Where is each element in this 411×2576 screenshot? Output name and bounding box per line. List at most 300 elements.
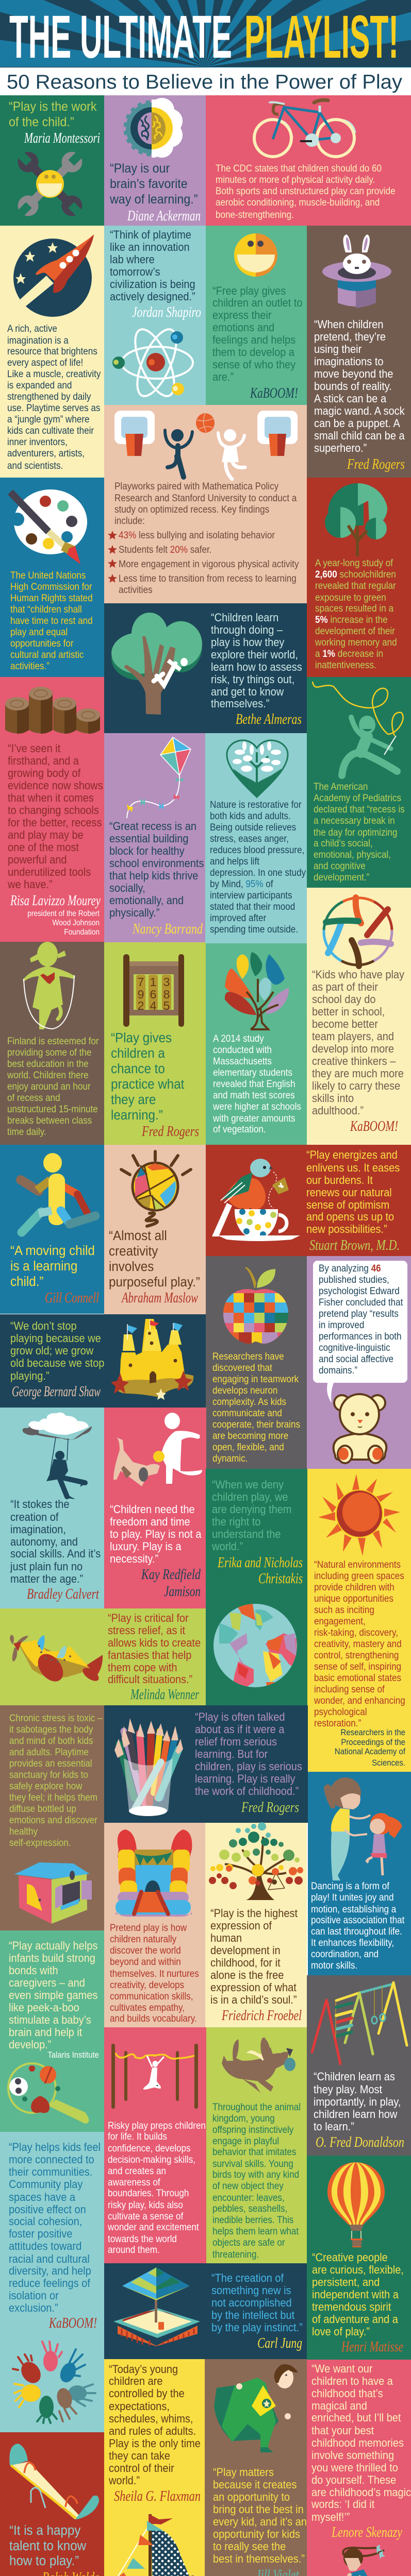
body text: sense of self, inspiring: [314, 1661, 401, 1672]
panel: nature is restorative: [205, 733, 307, 943]
quote: understand the: [212, 1528, 281, 1540]
quote: playing because we: [10, 1332, 101, 1345]
body text: play and equal: [10, 626, 68, 637]
quote: learn how to assess: [211, 661, 302, 673]
quote: “It is a happy: [9, 2523, 81, 2538]
icon: child climbing tree: [111, 613, 202, 715]
body text: children naturally: [110, 1934, 176, 1944]
quote: better in school,: [312, 1006, 385, 1018]
quote: “The creation of: [211, 2272, 284, 2284]
key findings list: Students felt 20% safer.: [119, 544, 212, 555]
speech bubble: By analyzing 46: [319, 1263, 381, 1274]
body text: can last throughout life.: [311, 1926, 402, 1937]
quote: myself!’”: [311, 2511, 350, 2523]
quote: “Kids who have play: [312, 969, 404, 981]
quote: feelings and helps: [212, 334, 295, 346]
quote: about as if it were a: [195, 1723, 285, 1736]
quote: creation of: [10, 1511, 59, 1523]
quote: [108, 2363, 201, 2487]
quote: pretend, they’re: [314, 331, 386, 343]
quote: of adventure and a: [312, 2313, 398, 2326]
panel: pretend quote rabbit: [307, 226, 411, 478]
body text: coordination, and: [311, 1948, 379, 1959]
icon: superhero child: [214, 2364, 298, 2452]
quote: [312, 969, 404, 1117]
quote: emotionally, and: [109, 894, 184, 907]
quote: the work of childhood.”: [195, 1785, 299, 1798]
panel: green spaces study: [307, 478, 411, 677]
icon: abacus number board: 4: [150, 999, 157, 1012]
quote: to really see the: [213, 2540, 286, 2553]
body text: a 1% decrease in: [315, 648, 383, 659]
name and title: Wood Johnson: [53, 918, 100, 927]
quote: [211, 612, 302, 710]
panel: Finland recess: [0, 942, 104, 1145]
quote: they play. Most: [314, 2083, 382, 2096]
quote: relief from serious: [195, 1736, 277, 1748]
body text: Academy of Pediatrics: [314, 792, 401, 803]
body text: have time to rest and: [10, 615, 93, 626]
quote: every kid, and it’s an: [213, 2516, 307, 2528]
quote: risk, try things out,: [211, 673, 294, 686]
name: Bradley Calvert: [27, 1586, 100, 1602]
body text: enjoy around an hour: [7, 1081, 91, 1092]
body text: provides an essential: [9, 1758, 92, 1769]
quote: “It stokes the: [10, 1498, 70, 1511]
icon: wrenches with smile: [12, 146, 88, 222]
icon: girl with skipping rope: [23, 942, 75, 1029]
name: Talaris Institute: [47, 2050, 99, 2060]
icon: rabbit in hat: [322, 234, 391, 308]
quote: “When children: [314, 318, 384, 331]
quote: even simple games: [9, 1989, 97, 2002]
name: Melinda Wenner: [130, 1687, 199, 1703]
body text: a necessary break in: [314, 815, 395, 826]
quote: block for healthy: [109, 845, 185, 857]
quote: independent with a: [312, 2289, 399, 2301]
quote: children play, we: [212, 1491, 288, 1503]
panel: kids who have play: [307, 888, 411, 1145]
quote: purposeful play.”: [109, 1275, 200, 1290]
body text: and helps lift: [210, 856, 259, 867]
quote: like peek-a-boo: [9, 2002, 79, 2014]
quote: growing body of: [8, 767, 80, 779]
quote: [9, 2523, 87, 2568]
body text: depression. In one study: [210, 867, 306, 878]
quote: “I’ve seen it: [8, 742, 60, 755]
body text: [212, 1351, 300, 1464]
quote: brain and help it: [9, 2026, 83, 2039]
quote: Play is the only time: [109, 2437, 201, 2450]
body text: Research and Stanford University to conduct a: [114, 493, 297, 503]
body text: revealed that regular: [315, 580, 396, 591]
body text: [7, 323, 101, 471]
icon: heart with tree and hands: [227, 740, 288, 797]
body text: kids can cultivate their: [7, 425, 94, 436]
panel: Massachusetts study: [206, 943, 307, 1145]
panel: Bradley Calvert quote: [0, 1408, 104, 1608]
body text: [210, 799, 306, 935]
quote: powerful and: [8, 854, 67, 866]
quote: and opens us up to: [306, 1211, 394, 1223]
panel: community play spaces: [0, 2132, 104, 2432]
icon: child with dog and ball: [113, 1413, 202, 1486]
speech bubble: cognitive-linguistic: [319, 1342, 390, 1353]
body text: provide children with: [314, 1582, 394, 1592]
quote: involves: [109, 1259, 154, 1274]
body text: [314, 781, 405, 883]
quote: them cope with: [108, 1662, 177, 1674]
quote: children a: [111, 1046, 165, 1061]
icon: puzzle apple: [222, 1267, 289, 1347]
quote: team players, and: [312, 1030, 394, 1043]
panel: Risa Lavizzo-Mourey quote: [0, 677, 104, 942]
quote: world.”: [108, 2475, 140, 2487]
quote: develop into more: [312, 1043, 394, 1055]
body text: The United Nations: [10, 570, 86, 581]
quote: stress relief, as it: [108, 1624, 185, 1637]
speech bubble: domains.”: [319, 1365, 357, 1376]
quote: actively designed.”: [110, 291, 195, 303]
panel: imagination rocket: [0, 226, 104, 478]
body text: aerobic conditioning, muscle-building, and: [216, 197, 380, 208]
quote: way of learning.”: [109, 192, 198, 207]
quote: like an innovation: [110, 241, 190, 253]
quote: that your best: [311, 2425, 374, 2437]
quote: tomorrow’s: [110, 266, 160, 278]
body text: and creates an: [108, 2165, 166, 2176]
body text: awareness of: [108, 2177, 161, 2188]
body text: engage in playful: [212, 2136, 279, 2146]
body text: imagination is a: [7, 335, 69, 346]
icon: rocket: [13, 234, 94, 317]
name: Carl Jung: [257, 2335, 302, 2351]
body text: Pretend play is how: [110, 1922, 187, 1933]
speech bubble: psychologist Edward: [319, 1285, 400, 1296]
quote: [306, 1149, 400, 1235]
subtitle strip: 50 Reasons to Believe in the Power of Play: [7, 71, 403, 93]
speech bubble: pretend play “results: [319, 1308, 399, 1319]
quote: “Play is often talked: [195, 1711, 285, 1723]
body text: use. Playtime serves as: [7, 402, 100, 413]
body text: helps them learn what: [212, 2226, 299, 2236]
body text: stated that their mood: [210, 901, 295, 912]
body text: complexity. As kids: [212, 1396, 286, 1407]
icon: bicycle: [254, 100, 355, 157]
body text: develops neuron: [212, 1385, 277, 1396]
body text: engaging in teamwork: [212, 1374, 299, 1384]
quote: alone is the free: [210, 1969, 284, 1981]
quote: persistent, and: [312, 2276, 380, 2289]
quote: [10, 1243, 95, 1289]
quote: civilization is being: [110, 278, 195, 291]
icon: teddy bear: [334, 1394, 386, 1463]
quote: control of their: [109, 2462, 174, 2475]
panel: Lenore Skenazy quote scooter: [307, 2360, 411, 2576]
quote: socially,: [109, 882, 145, 894]
body text: objects are safe or: [212, 2237, 285, 2248]
body text: and cognitive: [314, 860, 366, 871]
source: Proceedings of the: [341, 1738, 405, 1747]
icon: seesaw: [9, 2444, 99, 2519]
speech bubble: Fisher concluded that: [319, 1297, 403, 1308]
body text: encounter: leaves,: [212, 2192, 285, 2203]
body text: pebbles, seashells,: [212, 2203, 287, 2214]
quote: autonomy, and: [10, 1536, 78, 1548]
quote: children to have a: [311, 2375, 393, 2387]
icon: sandbox with umbrella: [113, 2267, 200, 2346]
body text: strengthened by daily: [7, 391, 91, 402]
quote: as part of their: [312, 981, 378, 993]
quote: [7, 742, 103, 891]
quote: childhood memories: [311, 2437, 404, 2449]
body text: “Natural environments: [314, 1559, 401, 1570]
body text: play! It unites joy and: [311, 1892, 394, 1903]
quote: and play may be: [8, 829, 84, 841]
body text: cultivate a sense of: [108, 2211, 184, 2222]
quote: firsthand, and a: [8, 755, 79, 767]
quote: spaces have a: [9, 2191, 75, 2204]
icon: tree logs: [5, 687, 100, 734]
body text: 2,600 schoolchildren: [315, 569, 396, 580]
quote: freedom and time: [110, 1516, 190, 1528]
quote: Community play: [9, 2178, 83, 2191]
quote: our burdens. It: [306, 1174, 373, 1187]
body text: creativity, develops: [110, 1979, 184, 1990]
quote: isolation or: [9, 2290, 59, 2302]
icon: ring of linked arms: [324, 897, 392, 966]
quote: become better: [312, 1018, 378, 1030]
quote: more connected to: [9, 2154, 94, 2166]
quote: caregivers – and: [9, 1977, 85, 1989]
quote: “Play helps kids feel: [9, 2141, 101, 2154]
quote: “Play gives: [111, 1030, 172, 1045]
body text: positive association that: [311, 1914, 404, 1925]
quote: words: ‘I did it: [311, 2498, 374, 2511]
quote: them to develop a: [212, 346, 294, 359]
body text: Human Rights stated: [10, 592, 93, 603]
icon: kids playing basketball: [114, 411, 298, 479]
quote: allows kids to create: [108, 1637, 201, 1649]
quote: bring out the best in: [213, 2503, 304, 2516]
quote: talent to know: [9, 2538, 87, 2553]
body text: diffuse bottled up: [9, 1803, 76, 1814]
quote: matter the age.”: [10, 1573, 83, 1585]
quote: practice what: [111, 1077, 184, 1092]
quote: difficult situations.”: [108, 1673, 192, 1686]
body text: psychological: [314, 1706, 367, 1717]
body text: sanctuary for kids to: [9, 1769, 88, 1780]
name and title: Foundation: [64, 927, 100, 937]
body text: inner inventors,: [7, 436, 68, 447]
quote: [108, 1612, 201, 1686]
body text: communicate and: [212, 1408, 282, 1418]
quote: “We don’t stop: [10, 1320, 77, 1332]
name: Erika and Nicholas: [217, 1555, 303, 1571]
name: George Bernard Shaw: [12, 1384, 101, 1400]
quote: involve something: [311, 2449, 394, 2462]
speech bubble: published studies,: [319, 1274, 389, 1285]
quote: “A moving child: [10, 1243, 95, 1258]
quote: they are: [111, 1092, 156, 1107]
body text: behavior that imitates: [212, 2146, 296, 2157]
quote: [312, 2251, 404, 2338]
panel: innovation lab quote: [104, 226, 206, 405]
quote: [9, 1940, 97, 2051]
panel: animal kingdom play: [206, 2027, 307, 2263]
body text: Throughout the animal: [212, 2102, 301, 2112]
quote: play is how they: [211, 636, 285, 649]
quote: [195, 1711, 302, 1798]
quote: [109, 820, 204, 919]
quote: “Play is the work: [9, 99, 97, 114]
icon: girl on scooter: [325, 2545, 392, 2576]
icon: ring of handprints: [13, 2342, 95, 2423]
icon: paint palette: [10, 489, 87, 564]
quote: expectations,: [109, 2400, 170, 2413]
quote: attitudes toward: [9, 2240, 81, 2252]
panel: neuron teamwork: [206, 1256, 307, 1469]
quote: tremendous spirit: [312, 2301, 391, 2313]
quote: [211, 2272, 303, 2334]
quote: to learn.”: [314, 2121, 354, 2133]
icon: tree: [325, 483, 387, 556]
quote: magic wand. A sock: [314, 405, 405, 417]
quote: necessity.”: [110, 1553, 158, 1565]
body text: development.”: [314, 872, 369, 883]
body text: creativity, mastery and: [314, 1638, 402, 1649]
icon: baby rattle: [8, 2063, 89, 2124]
body text: inedible berries. This: [212, 2214, 293, 2225]
quote: that help kids thrive: [109, 870, 198, 882]
quote: move beyond the: [314, 368, 393, 380]
panel: pretend play bouncy castle: [104, 1823, 205, 2027]
quote: learning. Play is really: [195, 1773, 295, 1785]
quote: [109, 161, 198, 207]
quote: best in themselves.”: [213, 2553, 305, 2565]
name: Christakis: [258, 1571, 303, 1587]
quote: enlivens us. It eases: [306, 1162, 400, 1174]
body text: offspring instinctively: [212, 2124, 293, 2135]
body text: wonder and excitement: [107, 2222, 199, 2232]
source: Sciences.: [372, 1758, 405, 1768]
quote: world.”: [211, 1540, 243, 1553]
panel: learn through doing: [104, 603, 307, 733]
name: Fred Rogers: [241, 1800, 299, 1816]
speech bubble: in improved: [319, 1319, 364, 1330]
quote: positive effect on: [9, 2204, 86, 2216]
quote: “Play energizes and: [306, 1149, 398, 1161]
quote: “Creative people: [312, 2251, 388, 2264]
quote: that when it comes: [8, 792, 94, 804]
body text: opportunities for: [10, 638, 74, 649]
key findings list: [108, 530, 299, 595]
body text: reduces blood pressure,: [210, 844, 304, 855]
icon: globe: [213, 1604, 297, 1690]
panel: purposeful play quote: [104, 1145, 206, 1314]
quote: love of play.”: [312, 2326, 370, 2338]
body text: risky play, kids also: [108, 2199, 183, 2210]
body text: wonder, and enhancing: [314, 1695, 405, 1706]
quote: childhood that’s: [311, 2387, 383, 2400]
body text: around them.: [108, 2244, 160, 2255]
quote: of the child.”: [9, 115, 74, 129]
quote: old because we stop: [10, 1357, 104, 1369]
icon: toy plane: [10, 1635, 103, 1686]
panel: Talaris Institute quote: [0, 1930, 104, 2132]
body text: birds toy with any kind: [212, 2169, 299, 2180]
quote: fantasies that help: [108, 1649, 191, 1662]
quote: imagination,: [10, 1523, 66, 1536]
body text: unstructured 15-minute: [7, 1104, 98, 1114]
body text: cooperate, their brains: [212, 1419, 300, 1430]
quote: through doing –: [211, 624, 283, 636]
quote: [211, 1479, 292, 1553]
body text: [10, 570, 93, 671]
quote: creative thinkers –: [312, 1055, 396, 1067]
quote: grow old; we grow: [10, 1345, 94, 1357]
body text: inattentiveness.: [315, 659, 376, 670]
body text: with greater amounts: [212, 1113, 295, 1124]
quote: develop.”: [9, 2039, 51, 2051]
quote: [314, 2071, 401, 2133]
quote: “Play is critical for: [108, 1612, 189, 1624]
quote: playing.”: [10, 1370, 50, 1382]
quote: how to play.”: [9, 2553, 79, 2568]
body text: communication skills,: [110, 1991, 193, 2002]
quote: exclusion.”: [9, 2302, 58, 2314]
name: Jamison: [164, 1584, 201, 1600]
quote: “Free play gives: [212, 285, 286, 297]
name: Friedrich Froebel: [221, 2008, 302, 2024]
body text: Dancing is a form of: [311, 1880, 390, 1891]
quote: are.”: [212, 371, 234, 383]
body text: [311, 1880, 404, 1971]
quote: racial and cultural: [9, 2253, 90, 2265]
speech bubble: and social affective: [319, 1353, 393, 1364]
body text: including sense of: [314, 1684, 385, 1694]
body text: such as inciting: [314, 1604, 374, 1615]
quote: by the play instinct.”: [211, 2321, 303, 2334]
body text: unique opportunities: [314, 1593, 393, 1604]
source: [335, 1728, 406, 1768]
icon: sand castle: [111, 1319, 193, 1400]
key findings list: 43% less bullying and isolating behavior: [119, 530, 275, 540]
panel: moving child quote: [0, 1145, 104, 1314]
quote: something new is: [211, 2284, 291, 2297]
name: Gill Connell: [45, 1290, 99, 1306]
quote: are curious, flexible,: [312, 2264, 404, 2276]
source: National Academy of: [335, 1747, 406, 1756]
panel: Kay Redfield Jamison quote: [104, 1408, 206, 1608]
icon: monkey bars figure: [111, 2044, 198, 2109]
body text: are becoming more: [212, 1430, 288, 1441]
icon: pencils in glass: [114, 1718, 183, 1816]
body text: elementary students: [213, 1067, 292, 1078]
quote: “We want our: [311, 2363, 373, 2375]
quote: [212, 285, 303, 383]
panel: UN human rights: [0, 478, 104, 677]
key findings list: Less time to transition from recess to learning: [119, 573, 297, 584]
body text: [216, 163, 396, 220]
quote: “Children learn: [211, 612, 278, 624]
body text: Massachusetts: [213, 1056, 272, 1066]
body text: declared that “recess is: [314, 804, 405, 815]
body text: exposure to green: [315, 592, 386, 603]
quote: children are: [109, 2375, 163, 2387]
quote: [111, 1030, 184, 1123]
body text: High Commission for: [10, 581, 92, 592]
